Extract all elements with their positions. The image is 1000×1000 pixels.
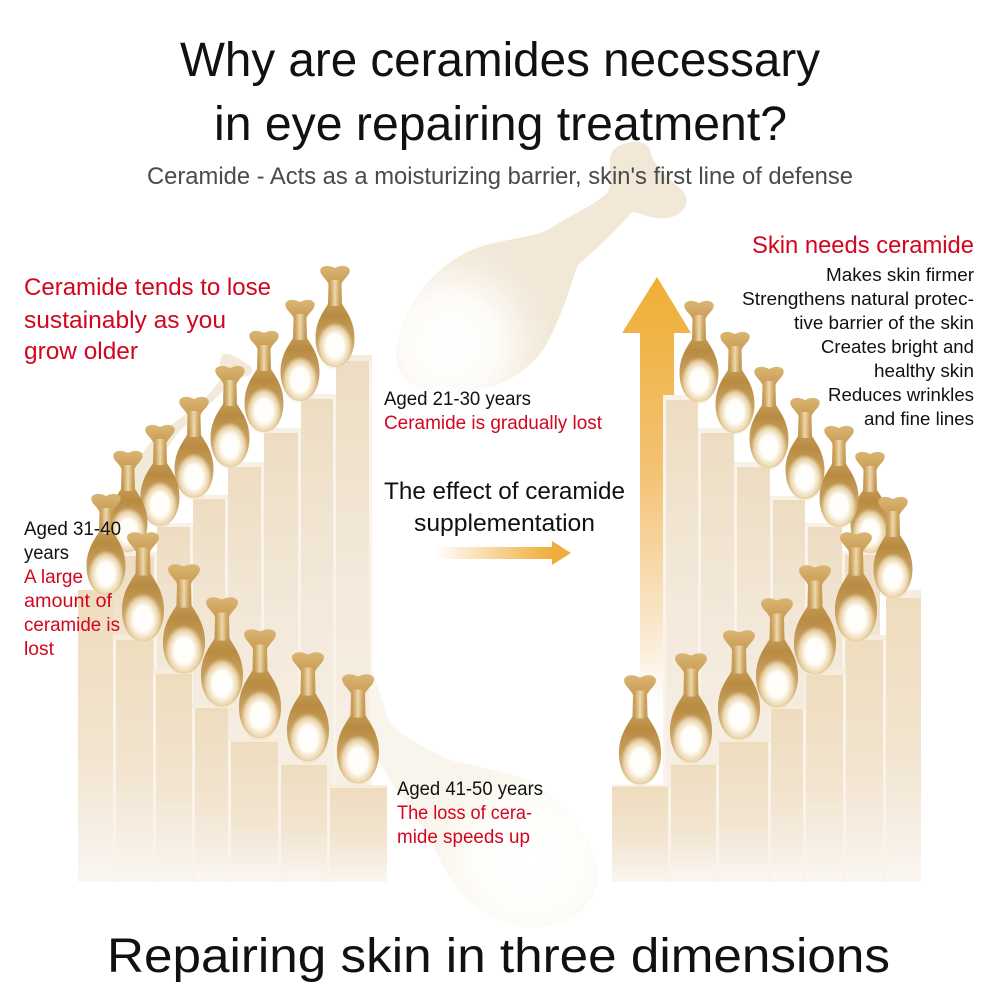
pale capsule: bottom centre [365,668,598,927]
stairs: left back [113,355,372,880]
capsules: left upper arc [86,266,354,598]
text block: aged 41-50 [397,779,543,848]
stairs: left front [78,590,387,882]
text block: skin needs ceramide: Reduces wrinkles [828,384,974,405]
text block: aged 31-40: A large [24,567,83,588]
text block: aged 21-30 [384,389,603,434]
title [180,34,820,151]
stairs: right back [663,395,880,880]
pale capsule: behind left stairs [118,354,252,510]
text block: skin needs ceramide: Skin needs ceramide [752,232,974,259]
text block: aged 31-40: lost [24,639,55,660]
text block: skin needs ceramide: Strengthens natural protec- [742,288,974,309]
bottom heading: Repairing skin in three dimensions [107,930,890,983]
text block: effect of supplementation: supplementation [414,510,595,537]
text block: skin needs ceramide: and fine lines [864,408,974,429]
subtitle: Ceramide - Acts as a moisturizing barrier, skin's first line of defense [147,163,853,190]
stairs: right front [612,590,921,882]
text block: ceramide loss heading: grow older [24,338,138,365]
text block: aged 41-50: mide speeds up [397,827,530,848]
arrow: big upward arrow [622,277,691,705]
text block: aged 21-30: Ceramide is gradually lost [384,413,603,434]
text block: aged 41-50: Aged 41-50 years [397,779,543,800]
capsules: left lower arc [122,532,379,787]
capsules: right lower arc [619,532,877,788]
text block: skin needs ceramide: tive barrier of the skin [794,312,974,333]
text block: skin needs ceramide: Creates bright and [821,336,974,357]
text block: ceramide loss heading [24,274,271,365]
text block: aged 21-30: Aged 21-30 years [384,389,531,410]
arrow: small right arrow [435,541,571,565]
text block: effect of supplementation: The effect of ceramide [384,478,625,505]
text block: effect of supplementation [384,478,625,537]
text block: skin needs ceramide: Makes skin firmer [826,264,974,285]
text block: aged 31-40: amount of [24,591,113,612]
text block: skin needs ceramide: healthy skin [874,360,974,381]
pale capsule: top centre [396,142,687,392]
title: Why are ceramides necessary [180,34,820,87]
text block: skin needs ceramide [742,232,974,429]
text block: aged 31-40: ceramide is [24,615,120,636]
text block: ceramide loss heading: Ceramide tends to lose [24,274,271,301]
title: in eye repairing treatment? [214,98,787,151]
text block: aged 31-40: Aged 31-40 [24,519,121,540]
text block: aged 41-50: The loss of cera- [397,803,532,824]
text block: aged 31-40 [24,519,121,660]
capsules: right upper arc [680,301,912,601]
text block: ceramide loss heading: sustainably as you [24,307,226,334]
text block: aged 31-40: years [24,543,69,564]
